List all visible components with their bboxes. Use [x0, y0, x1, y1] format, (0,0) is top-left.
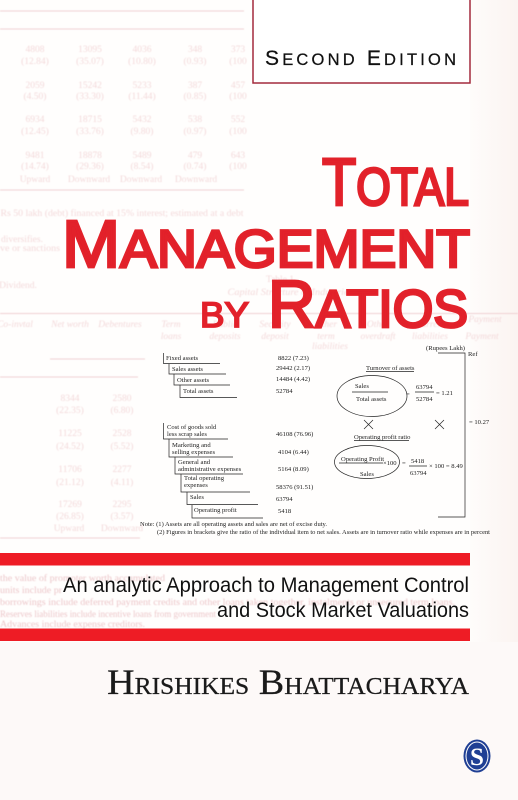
- cost ladder: Sales: [190, 494, 204, 501]
- faded background financial tables: 15242: [78, 81, 102, 91]
- faded background financial tables: 4808: [26, 45, 45, 55]
- cost ladder: General and: [178, 459, 211, 466]
- operating profit ratio formula: ×100: [383, 460, 397, 467]
- faded background financial tables: liabilities: [312, 342, 348, 352]
- cost ladder: less scrap sales: [167, 431, 207, 438]
- faded background financial tables: Upward: [20, 175, 51, 185]
- faded background financial tables: 479: [188, 151, 202, 161]
- turnover of assets formula: =: [406, 391, 410, 398]
- faded background financial tables: (4.11): [111, 477, 133, 488]
- faded background financial tables: Payment: [464, 332, 499, 342]
- faded background financial tables: 8344: [60, 394, 80, 404]
- faded background financial tables: (0.74): [184, 161, 206, 172]
- faded background financial tables: 643: [231, 151, 245, 161]
- faded background financial tables: (3.57): [111, 511, 133, 522]
- faded background financial tables: 2059: [26, 81, 45, 91]
- faded background financial tables: 538: [188, 115, 202, 125]
- faded background financial tables: (8.54): [131, 161, 153, 172]
- faded background financial tables: Downward: [120, 175, 162, 185]
- cost ladder: Total operating: [184, 475, 225, 482]
- faded background financial tables: 373: [231, 45, 245, 55]
- turnover of assets formula: 63794: [416, 384, 433, 391]
- faded background financial tables: Public: [212, 320, 238, 330]
- operating profit ratio formula: 63794: [410, 470, 427, 477]
- asset ladder: [164, 353, 310, 398]
- faded background financial tables: Other: [367, 320, 389, 330]
- faded background financial tables: (0.85): [184, 91, 206, 102]
- faded background financial tables: 5489: [132, 151, 152, 161]
- subtitle: [63, 574, 469, 622]
- faded background financial tables: (24.52): [56, 441, 84, 452]
- faded background financial tables: 13095: [78, 45, 102, 55]
- asset ladder: 29442 (2.17): [276, 365, 310, 372]
- faded background financial tables: Debentures: [97, 320, 142, 330]
- result bracket: (Rupees Lakh): [426, 345, 465, 352]
- operating profit ratio formula: =: [402, 460, 406, 467]
- cost ladder: Marketing and: [172, 442, 211, 449]
- ratio diagram: [140, 345, 490, 536]
- result bracket: = 10.27: [469, 419, 490, 426]
- faded background financial tables: 5233: [132, 81, 152, 91]
- faded background financial tables: (100: [229, 56, 247, 67]
- notes: Note: (1) Assets are all operating assets and sales are net of excise duty.: [140, 521, 327, 528]
- faded background financial tables: Table 1: [266, 275, 294, 285]
- faded background financial tables: (21.12): [56, 477, 84, 488]
- faded background financial tables: (100: [229, 91, 247, 102]
- faded background financial tables: diversifies.: [1, 234, 43, 245]
- faded background financial tables: (35.07): [76, 56, 104, 67]
- operating profit ratio formula: [334, 434, 464, 478]
- edition label: SECOND EDITION: [265, 47, 456, 70]
- cost ladder: administrative expenses: [178, 466, 242, 473]
- icon: publisher S logo: [464, 740, 490, 772]
- faded background financial tables: (6.80): [111, 405, 133, 416]
- faded background financial tables: 11225: [58, 429, 82, 439]
- subtitle: and Stock Market Valuations: [217, 599, 469, 622]
- faded background financial tables: deposit: [261, 332, 289, 342]
- faded background financial tables: the value of promoter worth accumulated: [0, 573, 165, 584]
- faded background financial tables: Downward: [68, 175, 110, 185]
- faded background financial tables: 387: [188, 81, 202, 91]
- faded background financial tables: 11706: [58, 465, 82, 475]
- operating profit ratio formula: × 100 = 8.49: [429, 463, 464, 470]
- faded background financial tables: (33.30): [76, 91, 104, 102]
- faded background financial tables: Rs 50 lakh (debt) financed at 15% interest; estimated at a debt: [0, 208, 244, 219]
- faded background financial tables: (12.45): [21, 126, 49, 137]
- faded background financial tables: (29.36): [76, 161, 104, 172]
- result bracket: [426, 345, 490, 517]
- asset ladder: Other assets: [177, 377, 209, 384]
- notes: (2) Figures in brackets give the ratio of the individual item to net sales. Assets are in turnover ratio while expenses are in percent: [157, 529, 490, 536]
- faded background financial tables: deposits: [209, 332, 241, 342]
- faded background financial tables: Downward: [175, 175, 217, 185]
- turnover of assets formula: Sales: [355, 383, 369, 390]
- title: [62, 145, 470, 342]
- asset ladder: Sales assets: [172, 366, 203, 373]
- operating profit ratio formula: Operating profit ratio: [354, 434, 411, 441]
- asset ladder: Total assets: [183, 388, 214, 395]
- faded background financial tables: liabilities: [412, 332, 448, 342]
- notes: [140, 521, 490, 536]
- faded background financial tables: 457: [231, 81, 245, 91]
- faded background financial tables: (26.85): [56, 511, 84, 522]
- cost ladder: 63794: [276, 496, 293, 503]
- faded background financial tables: (100: [229, 161, 247, 172]
- faded background financial tables: (12.84): [21, 56, 49, 67]
- operating profit ratio formula: Operating Profit: [341, 456, 384, 463]
- cost ladder: Cost of goods sold: [167, 424, 217, 431]
- turnover of assets formula: Turnover of assets: [366, 365, 415, 372]
- faded background financial tables: 5432: [132, 115, 152, 125]
- faded background financial tables: 2528: [112, 429, 132, 439]
- title: BY: [200, 296, 249, 335]
- faded background financial tables: (100: [229, 126, 247, 137]
- asset ladder: Fixed assets: [166, 355, 198, 362]
- faded background financial tables: 2580: [112, 394, 132, 404]
- faded background financial tables: 552: [231, 115, 245, 125]
- faded background financial tables: term: [317, 332, 335, 342]
- faded background financial tables: (0.97): [184, 126, 206, 137]
- faded background financial tables: (11.44): [128, 91, 156, 102]
- turnover of assets formula: = 1.21: [436, 390, 453, 397]
- faded background financial tables: 2295: [112, 500, 132, 510]
- cost ladder: 46108 (76.96): [276, 431, 313, 438]
- turnover of assets formula: Total assets: [356, 396, 387, 403]
- faded background financial tables: Term: [161, 320, 181, 330]
- cost ladder: selling expenses: [172, 449, 215, 456]
- faded background financial tables: 9481: [26, 151, 45, 161]
- faded background financial tables: Upward: [54, 524, 85, 534]
- result bracket: Ref: [468, 351, 478, 358]
- cost ladder: 5418: [278, 508, 292, 515]
- faded background financial tables: loans: [161, 332, 182, 342]
- asset ladder: 52784: [276, 388, 293, 395]
- faded background financial tables: (22.35): [56, 405, 84, 416]
- faded background financial tables: 18715: [78, 115, 102, 125]
- faded background financial tables: ve or sanctions: [0, 244, 60, 254]
- icon: publisher S logo: S: [470, 744, 484, 771]
- cost ladder: 4104 (6.44): [278, 449, 309, 456]
- title: MANAGEMENT: [62, 207, 470, 282]
- faded background financial tables: Dividend.: [0, 281, 37, 291]
- faded background financial tables: Net worth: [50, 320, 89, 330]
- title: TOTAL: [322, 145, 469, 220]
- red band top: [0, 553, 470, 566]
- faded background financial tables: (4.50): [24, 91, 46, 102]
- faded background financial tables: (5.52): [111, 441, 133, 452]
- faded background financial tables: (9.80): [131, 126, 153, 137]
- cost ladder: 5164 (8.09): [278, 466, 309, 473]
- faded background financial tables: 17269: [58, 500, 82, 510]
- edition box: [253, 0, 470, 83]
- faded background financial tables: Downward: [101, 524, 143, 534]
- faded background financial tables: (0.93): [184, 56, 206, 67]
- subtitle: An analytic Approach to Management Control: [63, 574, 469, 597]
- faded background financial tables: Reserves liabilities include incentive loans from government: [0, 609, 216, 620]
- cost ladder: Operating profit: [194, 507, 237, 514]
- operating profit ratio formula: Sales: [360, 471, 374, 478]
- faded background financial tables: Advances include expense creditors.: [0, 620, 145, 630]
- asset ladder: 14484 (4.42): [276, 376, 310, 383]
- turnover of assets formula: 52784: [416, 396, 433, 403]
- faded background financial tables: 18878: [78, 151, 102, 161]
- faded background financial tables: 348: [188, 45, 202, 55]
- faded background financial tables: Current: [415, 320, 445, 330]
- faded background financial tables: Security: [259, 320, 291, 330]
- cost ladder: [164, 423, 313, 518]
- faded background financial tables: 4036: [132, 45, 152, 55]
- faded background financial tables: Other: [315, 320, 337, 330]
- multiply signs: [364, 420, 444, 429]
- operating profit ratio formula: 5418: [411, 458, 425, 465]
- faded background financial tables: Payment: [467, 315, 502, 325]
- turnover of assets formula: [337, 365, 453, 416]
- red band bottom: [0, 628, 470, 641]
- title: RATIOS: [268, 267, 468, 342]
- asset ladder: 8822 (7.23): [278, 355, 309, 362]
- faded background financial tables: units include pr: [0, 586, 63, 596]
- cost ladder: expenses: [184, 482, 208, 489]
- faded background financial tables: (14.74): [21, 161, 49, 172]
- faded background financial tables: borrowings include deferred payment credits and other loans taken together, instalments or unsecured term loans.: [0, 597, 455, 608]
- faded background financial tables: (33.76): [76, 126, 104, 137]
- faded background financial tables: [0, 11, 518, 630]
- cost ladder: 58376 (91.51): [276, 484, 313, 491]
- faded background financial tables: (10.80): [128, 56, 156, 67]
- faded background financial tables: 2277: [112, 465, 132, 475]
- faded background financial tables: overdraft: [360, 331, 396, 342]
- faded background financial tables: Capital Structure of Industries: [228, 287, 353, 298]
- faded background financial tables: 6934: [26, 115, 45, 125]
- author: HRISHIKES BHATTACHARYA: [107, 662, 470, 702]
